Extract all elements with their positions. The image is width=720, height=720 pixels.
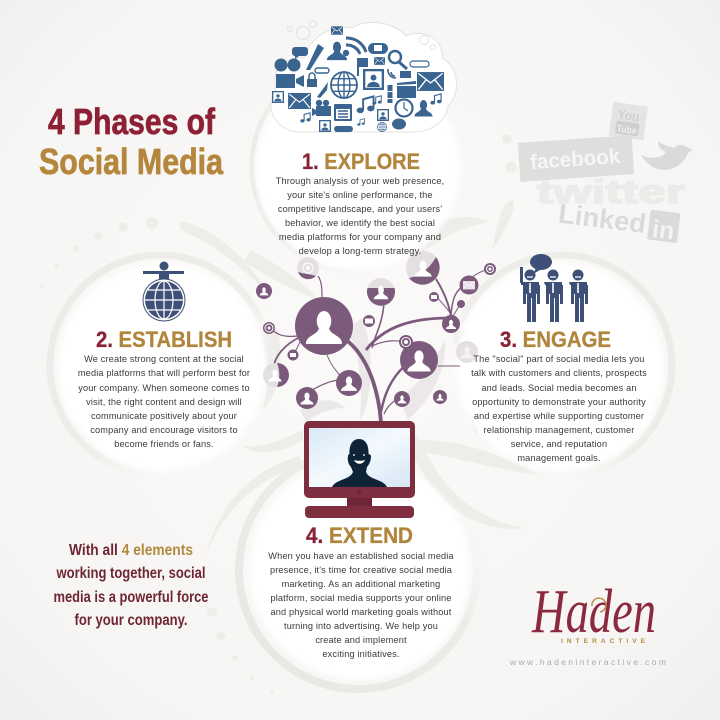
diagram: purple network tree	[256, 251, 496, 422]
heading: 1. Explore: 1. EXPLORE	[302, 149, 420, 174]
social network logos watermark	[518, 102, 693, 246]
text: explore body: behavior, we identify the best social	[285, 218, 435, 228]
text: explore body: your site's online performance, the	[287, 190, 433, 200]
target nodes	[263, 322, 275, 334]
text: extend body: exciting initiatives.	[322, 649, 400, 659]
text: establish body: We create strong content at the social	[84, 354, 244, 364]
text: engage body: opportunity to demonstrate your authority	[472, 397, 646, 407]
text: engage body: relationship management, customer	[483, 425, 635, 435]
icon: cloud of media icons	[271, 20, 457, 132]
ring and white circle behind Explore	[252, 60, 464, 272]
YouTube logo: You	[617, 107, 641, 125]
text: engage body: talk with customers and clients, prospects	[471, 368, 647, 378]
text: explore body: Through analysis of your web presence,	[276, 176, 444, 186]
text: explore body	[276, 176, 444, 256]
text: explore body: competitive landscape, and your users'	[278, 204, 442, 214]
website url: www.hadeninteractive.com	[509, 657, 666, 667]
text: establish body: become friends or fans.	[114, 439, 214, 449]
light target node	[297, 257, 319, 279]
branches	[272, 270, 486, 422]
YouTube logo: Tube	[616, 124, 638, 137]
text: extend body: turning into advertising. We help you	[284, 621, 438, 631]
text: establish body: your company. When someone comes to	[78, 383, 250, 393]
text: extend body: platform, social media supports your online	[270, 593, 452, 603]
Facebook logo	[518, 135, 634, 182]
Twitter bird	[641, 141, 693, 170]
callout: closing statement: for your company.	[74, 612, 188, 629]
icon: three business people	[520, 254, 588, 322]
text: extend body: and physical world marketing goals without	[271, 607, 452, 617]
text: extend body: create and implement	[315, 635, 407, 645]
text: extend body	[268, 551, 454, 659]
YouTube logo	[609, 102, 648, 140]
large person node right	[400, 341, 438, 379]
Facebook logo: facebook	[529, 145, 621, 174]
text: engage body	[471, 354, 647, 463]
title: 4 Phases of	[48, 101, 216, 142]
ring and white circle behind Extend	[239, 451, 477, 689]
title: Social Media	[39, 141, 224, 182]
callout: closing statement	[54, 542, 209, 629]
ring and white circle behind Establish	[50, 255, 270, 475]
text: establish body: company and encourage visitors to	[90, 425, 238, 435]
ring and white circle behind Engage	[452, 255, 672, 475]
text: explore body: develop a long-term strategy.	[299, 246, 421, 256]
mail nodes	[288, 350, 298, 360]
text: engage body: and expertise while supporting customer	[474, 411, 644, 421]
title	[39, 101, 224, 182]
text: establish body: visit, the right content and design will	[86, 397, 242, 407]
callout: closing statement: With all 4 elements	[69, 542, 193, 559]
main person node	[295, 297, 353, 355]
text: engage body: management goals.	[517, 453, 601, 463]
heading: 3. Engage: 3. ENGAGE	[500, 327, 611, 352]
medium person node	[336, 370, 362, 396]
text: engage body: and leads. Social media becomes an	[481, 383, 637, 393]
LinkedIn logo: Linked	[557, 199, 648, 239]
text: establish body: media platforms that will perform best for	[78, 368, 250, 378]
half tone nodes	[367, 278, 395, 306]
text: engage body: service, and reputation	[511, 439, 607, 449]
LinkedIn logo	[556, 199, 681, 246]
text: extend body: marketing. As an additional marketing	[282, 579, 440, 589]
cloud outline	[271, 22, 457, 132]
text: establish body	[78, 354, 250, 449]
Twitter wordmark: twitter	[537, 173, 685, 210]
logo: Haden Interactive: INTERACTIVE	[561, 638, 646, 645]
callout: closing statement: working together, social	[56, 565, 206, 582]
text: extend body: When you have an established social media	[268, 551, 454, 561]
text: establish body: communicate positively about your	[91, 411, 237, 421]
callout: closing statement: media is a powerful force	[54, 589, 209, 606]
icon: person on globe	[143, 262, 185, 321]
heading: 4. Extend: 4. EXTEND	[306, 523, 413, 548]
icon: monitor with smiling silhouette	[304, 421, 415, 518]
LinkedIn logo: in	[651, 215, 676, 246]
text: extend body: presence, it's time for creative social media	[270, 565, 453, 575]
heading: 2. Establish: 2. ESTABLISH	[96, 327, 232, 352]
logo: Haden Interactive	[509, 578, 666, 667]
text: explore body: media platforms for your company and	[279, 232, 441, 242]
small person nodes	[256, 283, 272, 299]
text: engage body: The "social" part of social media lets you	[473, 354, 645, 364]
logo: Haden Interactive: Haden	[531, 578, 656, 646]
